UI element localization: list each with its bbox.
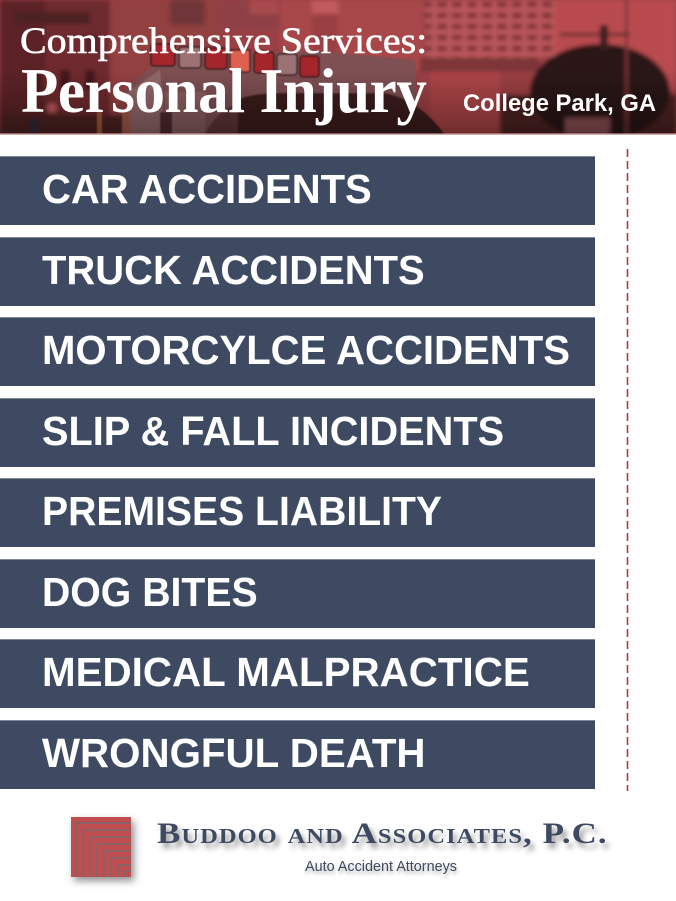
item: car accidents (0, 156, 595, 225)
item: medical malpractice (0, 639, 595, 708)
item: motorcycle accidents (0, 317, 595, 386)
firm tagline: Auto Accident Attorneys (305, 859, 457, 875)
item: premises liability: PREMISES LIABILITY (42, 488, 442, 534)
item: car accidents: CAR ACCIDENTS (42, 166, 372, 212)
heading line 1: Comprehensive Services: (20, 21, 427, 62)
service list (0, 156, 595, 789)
banner photo: ambulance in city street (0, 0, 676, 135)
header banner (0, 0, 676, 135)
item: truck accidents: TRUCK ACCIDENTS (42, 246, 425, 292)
location label: College Park, GA (463, 90, 656, 117)
item: wrongful death (0, 720, 595, 788)
firm name: Buddoo and Associates, P.C. (157, 817, 608, 850)
logo icon (68, 816, 140, 886)
heading line 2: Personal Injury (21, 55, 426, 126)
item: premises liability (0, 478, 595, 547)
item: dog bites (0, 558, 595, 628)
item: slip and fall (0, 398, 595, 466)
item: wrongful death: WRONGFUL DEATH (42, 730, 426, 776)
item: medical malpractice: MEDICAL MALPRACTICE (42, 649, 530, 695)
item: truck accidents (0, 236, 595, 306)
item: motorcycle accidents: MOTORCYLCE ACCIDENTS (42, 327, 570, 373)
item: dog bites: DOG BITES (42, 568, 258, 614)
item: slip and fall: SLIP & FALL INCIDENTS (42, 408, 504, 454)
dashed vertical divider (626, 149, 628, 791)
